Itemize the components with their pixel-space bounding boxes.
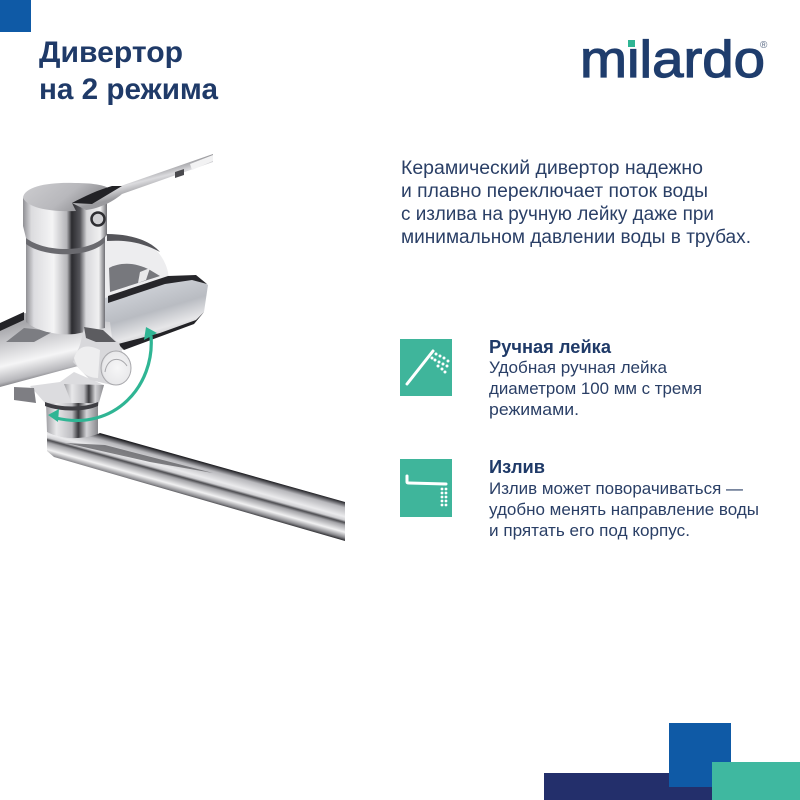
title: на 2 режима [39,73,218,106]
paragraph: ceramic diverter: Керамический дивертор надежно [401,158,703,179]
feature: spout [489,457,759,540]
paragraph: ceramic diverter: и плавно переключает поток воды [401,181,708,202]
logo: milardo: ® [760,40,768,51]
feature: hand shower: диаметром 100 мм с тремя [489,379,702,398]
wall plate crescent [105,234,169,300]
knob arrows [105,359,127,372]
feature: hand shower: Ручная лейка [489,337,612,357]
lower neck and outlet [30,372,104,406]
horizontal pipe [0,313,112,387]
feature: hand shower [489,337,702,419]
title [39,36,218,106]
housing [105,276,208,350]
cap [23,183,108,211]
feature: spout: удобно менять направление воды [489,500,759,519]
paragraph: ceramic diverter: минимальном давлении воды в трубах. [401,227,751,248]
feature: hand shower: Удобная ручная лейка [489,358,668,377]
faucet illustration [0,154,345,541]
upper body [23,198,107,250]
feature: spout: Излив [489,457,545,477]
feature: hand shower: режимами. [489,400,579,419]
pin [92,212,104,226]
spout [47,432,345,541]
feature: spout: и прятать его под корпус. [489,521,690,540]
corner blocks: bottom right [544,723,800,800]
feature: spout: Излив может поворачиваться — [489,479,743,498]
paragraph: ceramic diverter [401,158,751,248]
title: Дивертор [39,36,183,69]
lower body [26,240,105,334]
corner square: top left [0,0,31,32]
paragraph: ceramic diverter: с излива на ручную лейку даже при [401,204,714,225]
logo: milardo: milardo [580,31,765,89]
icon: hand shower [400,339,452,396]
icon: spout [400,459,452,517]
lever [72,154,213,210]
diverter switch [73,328,126,385]
diverter knob [101,351,131,385]
arrow: teal two-headed rotation [48,327,157,422]
